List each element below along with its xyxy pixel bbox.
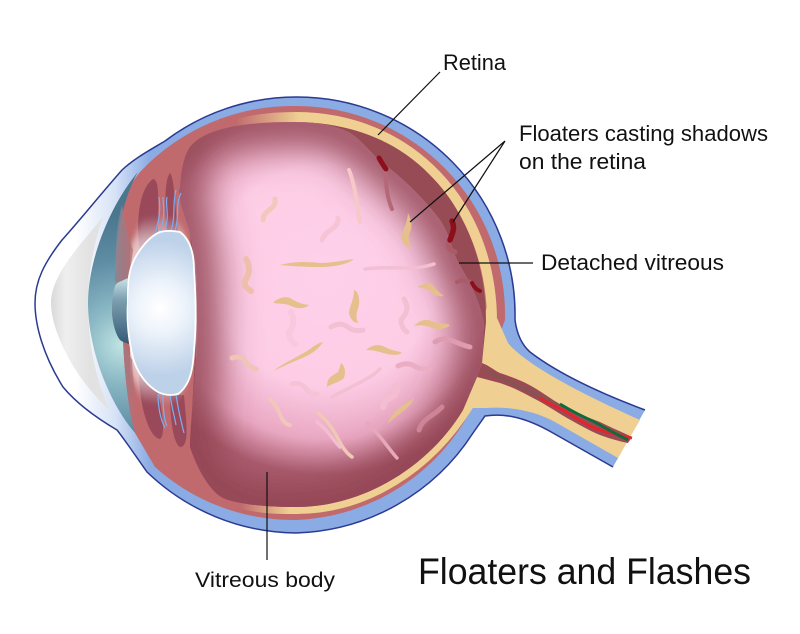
title: Floaters and Flashes (418, 551, 751, 592)
shadow left (289, 312, 295, 344)
ciliary hollow upper right (165, 173, 178, 232)
outer eye outline (35, 97, 645, 533)
nerve faint centre line (484, 370, 567, 408)
floater upper right of centre (401, 213, 411, 247)
shadow lower thin (317, 422, 340, 447)
lens (127, 231, 196, 395)
floater long top (349, 170, 360, 222)
floater right upper (417, 283, 444, 296)
floater far left (232, 357, 256, 369)
leader line: retina (378, 72, 440, 135)
retina cream layer bottom (240, 405, 470, 510)
leader line: vitreous body (266, 472, 268, 560)
glow around lens (130, 216, 198, 404)
outer sclera and cornea (35, 97, 645, 533)
red floater mid (450, 221, 453, 240)
shadow of mid floater (448, 241, 455, 252)
floater left (273, 297, 309, 308)
zonule fibres upper (155, 190, 181, 233)
ciliary hollow upper left (138, 179, 158, 250)
ciliary hollow lower right (170, 395, 187, 447)
shadow corner (419, 407, 442, 430)
floater lower centre (327, 363, 345, 387)
floater central (349, 290, 359, 323)
cornea inner grey region (51, 217, 110, 410)
floater long lower (318, 413, 352, 457)
iris band fade (116, 205, 142, 430)
shadow center-right low (398, 364, 430, 369)
label: detached vitreous: Detached vitreous (541, 250, 724, 275)
floaters: dark red on retina (379, 158, 480, 291)
shadow lower long (367, 423, 397, 458)
floater right (414, 320, 450, 329)
shadow right of centre (401, 299, 407, 332)
label: on the retina: on the retina (519, 149, 647, 174)
shadow right low (383, 386, 397, 407)
retina cream layer top (238, 117, 493, 345)
optic nerve sheath (462, 300, 640, 458)
red floater lower (472, 283, 480, 291)
shadow of lower floater (457, 280, 472, 284)
anterior chamber (88, 172, 138, 434)
floater left upper (245, 259, 251, 291)
floater diagonal (273, 342, 323, 371)
shadow right dark (435, 339, 470, 347)
zonule fibres lower (158, 394, 184, 433)
iris (112, 278, 129, 344)
nerve artery (540, 398, 632, 438)
eyeball (35, 97, 645, 533)
shadow long diagonal (332, 369, 380, 397)
shadow lower (292, 383, 317, 394)
vitreous body (179, 122, 484, 507)
shadow near detached floater (385, 168, 392, 209)
leader lines: floaters (410, 141, 505, 222)
floater top left (263, 199, 275, 220)
red floater upper (379, 158, 386, 169)
choroid red layer (115, 106, 505, 520)
floater lower left (270, 399, 290, 425)
nerve vein (560, 404, 628, 440)
floater long horizontal (280, 259, 354, 267)
floater lower right (388, 398, 414, 423)
ciliary hollow lower left (139, 375, 163, 439)
label: vitreous body: Vitreous body (195, 569, 336, 592)
anterior region: ciliary body (124, 173, 196, 447)
shadow under centre (331, 324, 363, 331)
optic nerve channel (477, 363, 632, 443)
label: floaters casting shadows: Floaters casting shadows (519, 121, 768, 146)
leader line: detached vitreous (459, 262, 533, 264)
floaters: cream (273, 213, 450, 423)
floaters: pink shadows (289, 168, 472, 458)
detached space behind vitreous (180, 122, 486, 507)
floaters: faded orange (232, 170, 360, 457)
shadow top (322, 218, 338, 240)
infographic: eye cross-section with floaters (34, 54, 768, 592)
label: retina: Retina (443, 50, 507, 75)
floater center right (366, 345, 402, 355)
shadow long top right (365, 264, 434, 269)
